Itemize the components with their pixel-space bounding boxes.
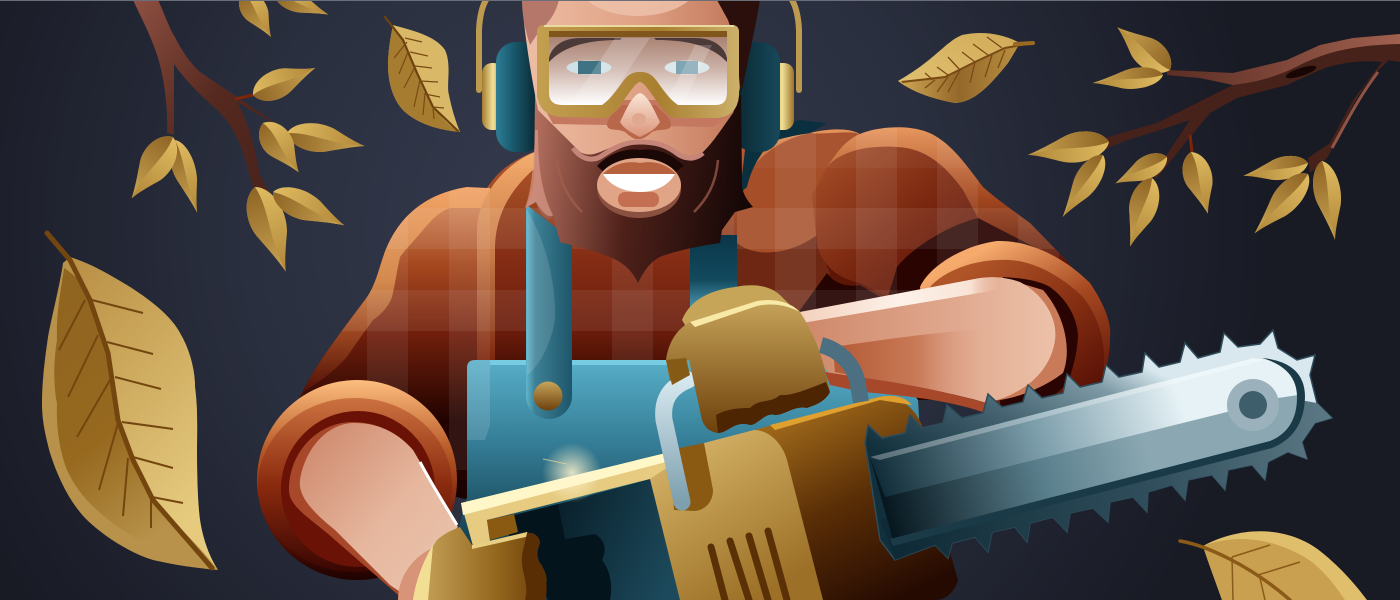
ear clip right xyxy=(770,63,794,130)
chain teeth xyxy=(865,330,1332,560)
hair patch left xyxy=(522,0,559,45)
left shoulder xyxy=(300,187,490,398)
strap button xyxy=(534,382,562,410)
vents xyxy=(711,531,787,600)
moustache shadow xyxy=(597,150,684,174)
back strap over shoulder xyxy=(740,120,827,193)
right eye xyxy=(664,60,710,74)
plaid bands xyxy=(342,128,1059,470)
ear muff right xyxy=(734,42,780,152)
leaf bottom right xyxy=(1180,531,1367,600)
top glove xyxy=(666,285,830,433)
left forearm xyxy=(289,422,458,600)
chest right side xyxy=(737,132,860,330)
front handle frame xyxy=(461,443,720,546)
leaves on left branch xyxy=(118,0,367,278)
handle slot xyxy=(670,443,713,511)
upper lip xyxy=(603,162,676,174)
moustache outline xyxy=(573,142,703,159)
face xyxy=(522,0,760,158)
falling leaf: top centre xyxy=(385,17,460,132)
chainsaw xyxy=(461,330,1332,600)
left strap xyxy=(526,205,572,419)
shirt fold xyxy=(477,150,540,360)
goggle frame top shading xyxy=(549,31,727,37)
hand guard tube front xyxy=(664,380,688,502)
bar pivot hole xyxy=(1239,391,1267,419)
left sleeve cuff xyxy=(257,380,457,580)
falling leaf: top right xyxy=(898,33,1033,103)
ear clip left xyxy=(482,63,504,130)
mouth patch rim xyxy=(597,160,681,218)
upper arm muscle xyxy=(812,147,978,297)
beard left fringe xyxy=(525,130,553,216)
hair patch right xyxy=(717,0,760,95)
right forearm xyxy=(800,277,1067,413)
ear muff left xyxy=(496,42,544,152)
right shoulder xyxy=(756,127,1072,395)
left eye xyxy=(566,60,612,74)
bar lower half xyxy=(870,358,1298,540)
main gold body xyxy=(650,430,823,600)
eyebrows xyxy=(549,38,727,62)
beard streaks xyxy=(557,160,718,212)
bar dark border xyxy=(890,358,1305,546)
teeth xyxy=(603,174,675,192)
chin patch xyxy=(597,158,681,212)
goggle frame xyxy=(537,25,739,118)
lower chain teeth shading xyxy=(880,400,1332,560)
cheek shadow under goggles xyxy=(540,100,738,127)
bottom glove xyxy=(413,527,547,600)
chest beside fold xyxy=(495,152,534,360)
left branch xyxy=(133,0,290,203)
bar pivot ring xyxy=(1227,379,1279,431)
window dark panel xyxy=(500,479,682,600)
dark wedge under arm xyxy=(888,218,1040,297)
bib sheen xyxy=(467,360,490,440)
sparkle xyxy=(542,443,602,503)
lower lip xyxy=(618,192,659,207)
bar upper half xyxy=(870,358,1298,497)
leaves on right branch xyxy=(1026,16,1348,251)
chainsaw rear dark body xyxy=(754,397,958,600)
right strap xyxy=(690,235,737,310)
right sleeve cuff xyxy=(920,241,1110,415)
big leaf on left xyxy=(42,233,218,570)
lumberjack xyxy=(257,0,1332,600)
overalls bib xyxy=(440,360,930,600)
goggle lens xyxy=(549,37,727,105)
right branch xyxy=(1092,34,1400,178)
inner window notch xyxy=(514,504,611,600)
shirt torso with plaid xyxy=(300,127,1073,500)
forehead highlight xyxy=(576,0,700,16)
nose xyxy=(607,93,671,139)
beard xyxy=(525,95,753,283)
lens reflections xyxy=(570,38,712,105)
hand guard tube rear xyxy=(821,345,861,402)
headband xyxy=(479,0,799,90)
top edge line xyxy=(0,0,1400,1)
